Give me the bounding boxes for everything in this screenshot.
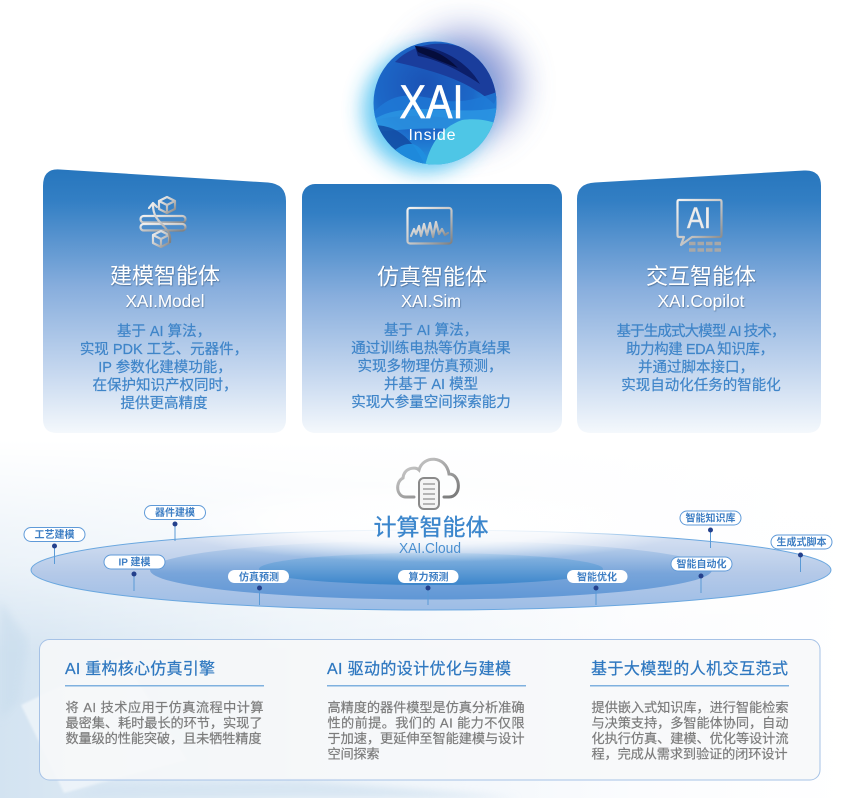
description: 在保护知识产权同时， [92, 377, 238, 394]
panel: interaction agent [577, 170, 821, 433]
description: 实现自动化任务的智能化 [621, 377, 781, 394]
column: LLM interaction: 基于大模型的人机交互范式 [591, 660, 788, 678]
column: LLM interaction: 程，完成从需求到验证的闭环设计 [592, 746, 788, 762]
chart: concentric compute platform ellipses [31, 482, 831, 610]
subheading: XAI.Sim [401, 291, 461, 311]
subheading: XAI.Cloud: XAI.Cloud [399, 540, 461, 557]
tag: intelligent optimization [567, 570, 628, 605]
subheading: XAI.Copilot [658, 291, 745, 311]
description [351, 322, 511, 411]
icon: AI chat bubble [678, 200, 722, 250]
tag: intelligent automation [671, 557, 732, 593]
description [616, 323, 786, 394]
tag: process modeling [24, 528, 85, 564]
panel: modeling agent [43, 169, 286, 433]
logo text: Inside: Inside [408, 127, 456, 144]
tag: simulation prediction [228, 570, 289, 605]
description [80, 323, 248, 412]
column: AI driven design: AI 驱动的设计优化与建模 [327, 660, 511, 678]
tag: intelligent automation: 智能自动化 [676, 558, 726, 571]
heading: 建模智能体 [110, 264, 220, 288]
tag: IP modeling: IP 建模 [118, 556, 151, 569]
logo text: XAI: XAI [400, 75, 464, 128]
description: 提供更高精度 [120, 395, 208, 412]
tag: simulation prediction: 仿真预测 [239, 570, 279, 583]
description: 基于 AI 算法， [384, 322, 478, 339]
column: core simulation engine: AI 重构核心仿真引擎 [65, 660, 215, 678]
tag: intelligent knowledge base: 智能知识库 [686, 512, 736, 525]
column: core simulation engine: 数量级的性能突破，且未牺牲精度 [66, 731, 262, 746]
column: AI driven design: 性的前提。我们的 AI 能力不仅限 [328, 714, 524, 730]
column: LLM interaction: 提供嵌入式知识库，进行智能检索 [592, 699, 788, 715]
column: core simulation engine: 最密集、耗时最长的环节，实现了 [66, 714, 262, 730]
heading: 交互智能体 [646, 264, 756, 289]
icon: cloud server [398, 459, 458, 509]
tag: device modeling: 器件建模 [155, 506, 195, 519]
description: 基于 AI 算法， [117, 323, 211, 340]
icon: waveform window [408, 208, 452, 244]
column: AI driven design: 于加速，更延伸至智能建模与设计 [328, 731, 524, 746]
tag: generated scripts [771, 535, 832, 572]
column: LLM interaction: 化执行仿真、建模、优化等设计流 [592, 730, 788, 746]
icon: modeling cubes and arrow [140, 197, 186, 247]
tag: intelligent optimization: 智能优化 [577, 570, 617, 583]
icon: AI chat bubble: AI [687, 202, 711, 235]
tag: process modeling: 工艺建模 [34, 528, 74, 541]
description: 实现多物理仿真预测， [358, 357, 502, 375]
tag: IP modeling [104, 555, 165, 591]
heading: 仿真智能体 [377, 264, 487, 290]
tag: generated scripts: 生成式脚本 [776, 536, 826, 549]
tag: compute prediction: 算力预测 [408, 570, 448, 583]
description: 通过训练电热等仿真结果 [351, 339, 511, 357]
panel: simulation agent [302, 184, 562, 433]
tag: device modeling [144, 506, 206, 541]
description: 实现 PDK 工艺、元器件， [80, 341, 248, 358]
description: IP 参数化建模功能， [98, 359, 232, 376]
logo: XAI Inside sphere [363, 32, 518, 172]
panel: summary [40, 640, 820, 780]
tag: intelligent knowledge base [680, 511, 741, 548]
column: core simulation engine [65, 660, 264, 746]
column: LLM interaction [590, 660, 789, 762]
description: 并通过脚本接口， [638, 359, 754, 376]
description: 实现大参量空间探索能力 [351, 394, 511, 411]
tag: compute prediction [398, 570, 458, 605]
description: 助力构建 EDA 知识库， [626, 341, 774, 358]
subheading: XAI.Model [126, 291, 204, 311]
column: LLM interaction: 与决策支持，多智能体协同，自动 [592, 714, 788, 730]
description: 并基于 AI 模型 [384, 376, 478, 393]
column: AI driven design: 高精度的器件模型是仿真分析准确 [328, 699, 524, 715]
column: AI driven design: 空间探索 [328, 746, 380, 762]
description: 基于生成式大模型 AI 技术， [616, 323, 786, 340]
column: core simulation engine: 将 AI 技术应用于仿真流程中计算 [66, 700, 264, 715]
heading: compute agent: 计算智能体 [374, 514, 488, 540]
column: AI driven design [327, 660, 526, 762]
